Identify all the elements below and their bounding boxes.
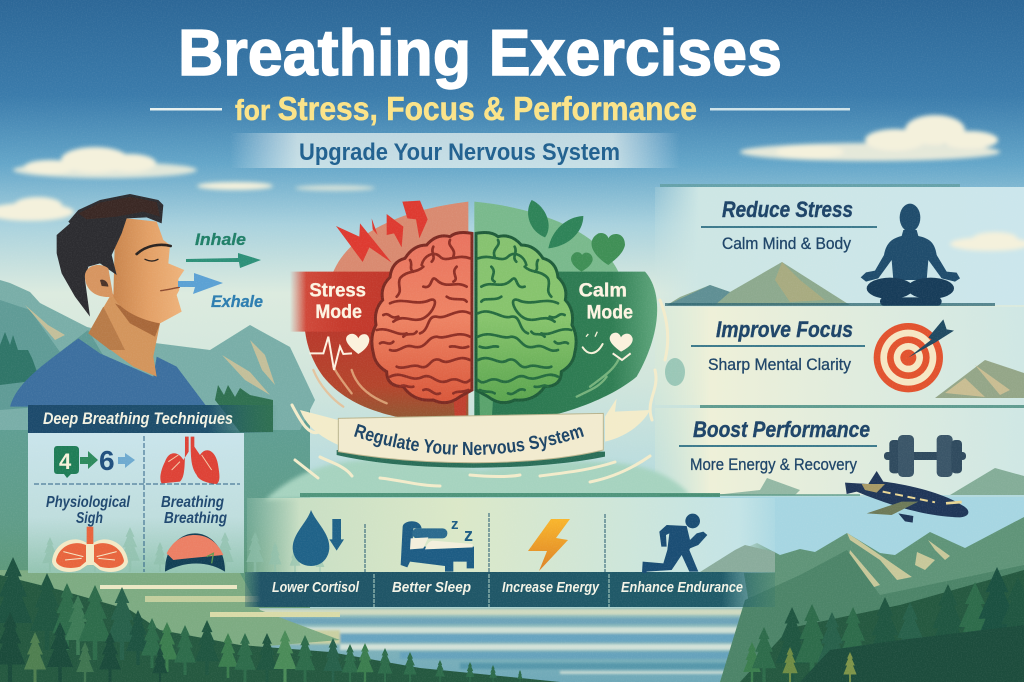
benefit: boost performance bbox=[679, 417, 968, 523]
breathing breathing label: Breathing bbox=[164, 510, 227, 527]
calm mode label bbox=[579, 281, 633, 324]
background: right mountains bbox=[667, 262, 1024, 495]
benefit: reduce stress bbox=[701, 197, 960, 306]
background: left mountains bbox=[0, 280, 315, 432]
strip background bbox=[247, 498, 775, 573]
panel dividers bbox=[34, 436, 240, 572]
panel: benefits background bbox=[655, 184, 1024, 567]
panel: deep breathing techniques bbox=[28, 405, 278, 573]
stress mode label: Stress bbox=[309, 281, 366, 302]
heading: Boost Performance bbox=[693, 417, 870, 442]
hair bbox=[57, 194, 163, 317]
stress mode label: Mode bbox=[315, 302, 362, 323]
background: left forest bbox=[0, 557, 560, 682]
brain diagram bbox=[290, 200, 657, 424]
neck bbox=[88, 293, 160, 377]
benefit: enhance endurance bbox=[621, 514, 743, 596]
background: left hillside bbox=[0, 395, 310, 610]
benefit: lower cortisol: Lower Cortisol bbox=[272, 579, 360, 596]
smile and heart icon bbox=[583, 332, 633, 360]
benefit: better sleep bbox=[392, 516, 474, 596]
lightning bolts bbox=[336, 201, 428, 263]
banner: regulate your nervous system: Regulate Your Nervous System bbox=[354, 424, 584, 456]
icon: 4 to 6 timing: 6 bbox=[99, 445, 115, 476]
breathing breathing label bbox=[161, 494, 227, 527]
stress mode label bbox=[309, 281, 366, 323]
icon: red lungs bbox=[160, 437, 219, 484]
benefit: enhance endurance: Enhance Endurance bbox=[621, 579, 743, 596]
subtitle with rules: for Stress, Focus & Performance bbox=[235, 90, 697, 127]
leaves and hearts bbox=[528, 200, 625, 272]
strip hazy trees bbox=[246, 532, 324, 572]
icon: 4 to 6 timing bbox=[54, 445, 135, 478]
left brain hemisphere bbox=[372, 233, 472, 403]
benefit: increase energy bbox=[502, 519, 600, 596]
icon: target with arrow bbox=[874, 319, 954, 392]
physiological sigh label: Sigh bbox=[76, 510, 103, 527]
face bbox=[113, 218, 184, 323]
icon: meditating figure bbox=[861, 204, 960, 306]
benefit: improve focus bbox=[691, 317, 954, 392]
background: clouds bbox=[0, 115, 1000, 221]
inhale label: Inhale bbox=[195, 230, 246, 249]
description: Calm Mind & Body bbox=[722, 234, 851, 253]
panel hazy trees bbox=[42, 527, 234, 572]
swirl strokes on mode panels bbox=[313, 360, 618, 407]
panel: lower benefits strip bbox=[245, 493, 775, 607]
heading: Improve Focus bbox=[716, 317, 853, 342]
icon: diaphragm bbox=[165, 533, 225, 572]
icon: 4 to 6 timing: 4 bbox=[59, 449, 72, 474]
background: right mountains and forest bbox=[720, 517, 1024, 682]
panel header: Deep Breathing Techniques bbox=[43, 409, 233, 428]
person breathing illustration bbox=[10, 194, 207, 407]
heading: Reduce Stress bbox=[722, 197, 853, 222]
calm mode label: Calm bbox=[579, 281, 627, 302]
benefit: better sleep: z bbox=[464, 525, 473, 545]
brain stems bbox=[453, 390, 467, 422]
stress half background bbox=[290, 202, 468, 423]
calm half background bbox=[474, 202, 657, 424]
description: Sharp Mental Clarity bbox=[708, 355, 851, 374]
benefit: lower cortisol bbox=[272, 510, 360, 596]
strip mountain bbox=[700, 545, 775, 572]
panel background bbox=[28, 433, 244, 573]
panel: benefits divider rules bbox=[660, 303, 1024, 496]
exhale arrow bbox=[178, 273, 223, 294]
strip top bar bbox=[300, 493, 720, 497]
ear bbox=[85, 265, 113, 297]
benefit: increase energy: Increase Energy bbox=[502, 579, 600, 596]
inhale arrow bbox=[186, 253, 261, 268]
shirt bbox=[10, 338, 207, 407]
cloud on the right bbox=[950, 232, 1024, 251]
breathing breathing label: Breathing bbox=[161, 494, 224, 511]
banner: regulate your nervous system bbox=[300, 398, 649, 468]
calm mode label: Mode bbox=[587, 303, 633, 324]
background: lake bbox=[250, 608, 1024, 682]
icon: airplane bbox=[845, 471, 968, 523]
physiological sigh label bbox=[46, 494, 130, 527]
title: Breathing Exercises bbox=[178, 16, 782, 89]
breath arrows bbox=[178, 230, 263, 311]
background: mid-ground meadow bbox=[0, 570, 340, 660]
description: More Energy & Recovery bbox=[690, 455, 857, 474]
background: center swirl bbox=[265, 300, 690, 500]
exhale label: Exhale bbox=[211, 292, 263, 311]
icon: dumbbell bbox=[884, 435, 966, 477]
icon: orange lungs bbox=[52, 527, 128, 572]
panel header bbox=[28, 405, 278, 433]
eye and brow bbox=[137, 245, 179, 291]
strip label bar bbox=[245, 572, 775, 607]
tagline band bbox=[230, 133, 680, 168]
tagline band: Upgrade Your Nervous System bbox=[299, 139, 620, 166]
right brain hemisphere bbox=[476, 233, 576, 403]
physiological sigh label: Physiological bbox=[46, 494, 130, 511]
benefit: better sleep: z bbox=[451, 516, 458, 533]
heartbeat and heart icon bbox=[309, 334, 369, 370]
benefit: better sleep: Better Sleep bbox=[392, 579, 471, 596]
